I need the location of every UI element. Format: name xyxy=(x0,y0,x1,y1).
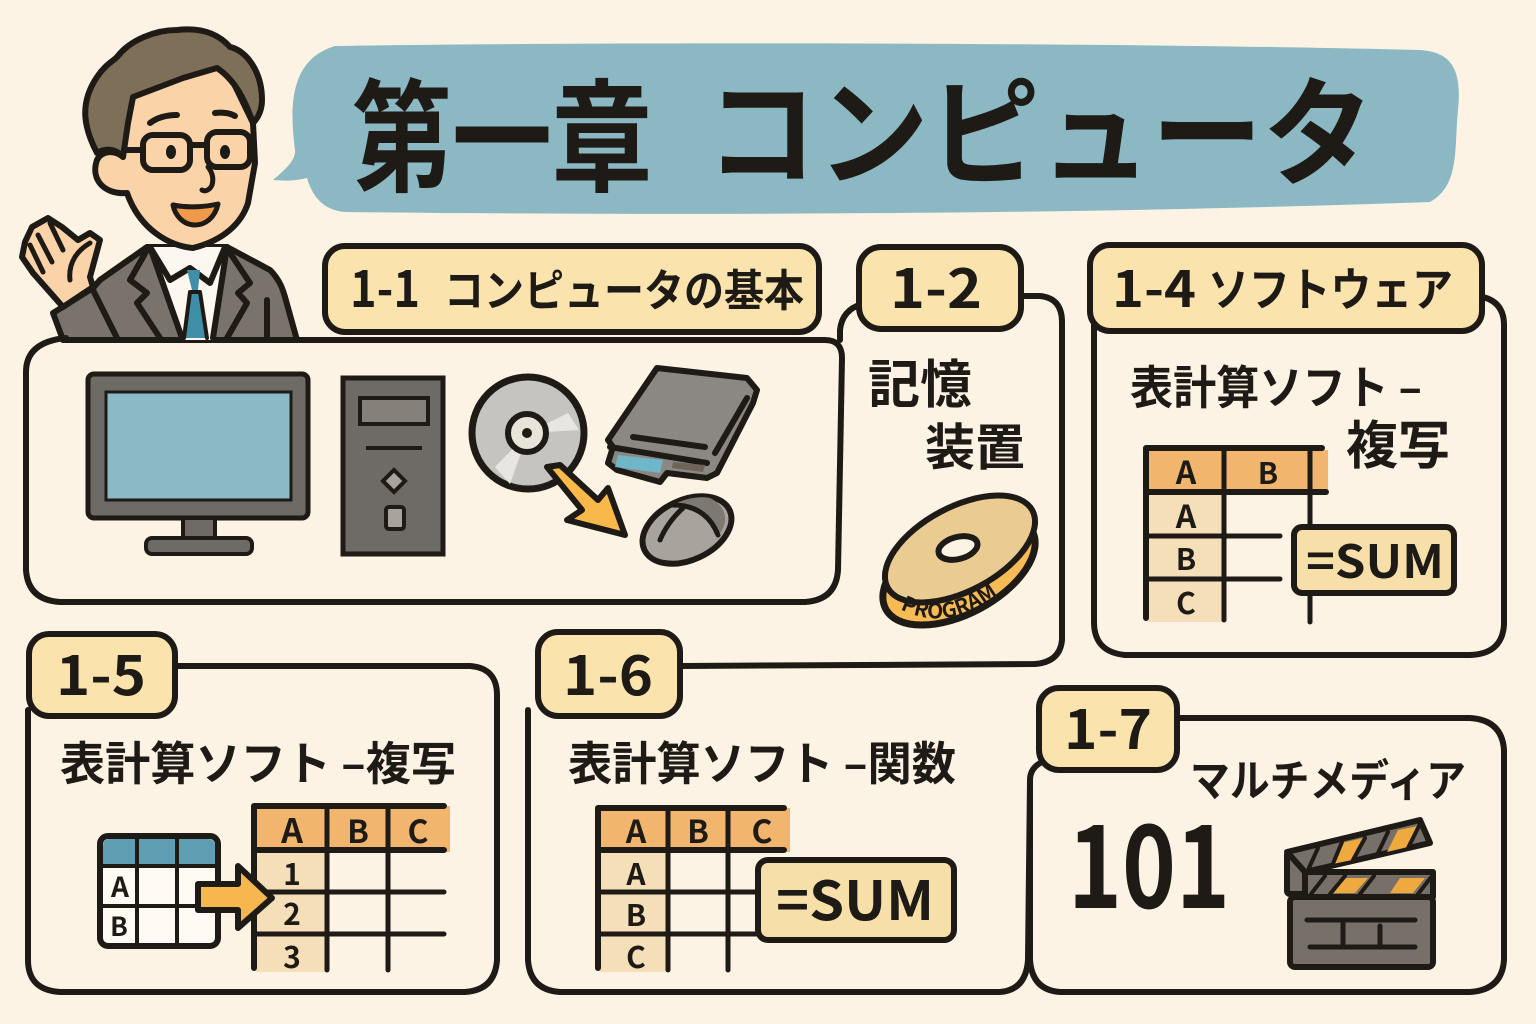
text: 101: 101 xyxy=(1068,779,1230,941)
large target table xyxy=(254,804,450,977)
text: 記憶装置: 記憶 xyxy=(868,343,972,418)
spreadsheet: C xyxy=(752,807,772,853)
panel: 1-2 storage xyxy=(683,244,1065,669)
icon: monitor xyxy=(88,374,308,554)
title banner xyxy=(273,39,1459,218)
large target table: B xyxy=(347,807,369,853)
icon: clapperboard xyxy=(1287,820,1433,967)
panel: 1-7 multimedia xyxy=(1030,686,1504,992)
arrow: copy xyxy=(198,866,272,928)
icon: optical disc xyxy=(472,377,584,489)
suit body xyxy=(53,247,297,340)
panel: 1-1 computer basics xyxy=(26,246,842,602)
heading tag: 1-5 xyxy=(29,632,175,716)
glasses xyxy=(127,145,207,150)
spreadsheet: C xyxy=(626,933,646,977)
heading tag: 1-2 xyxy=(859,245,1021,329)
spreadsheet xyxy=(1146,448,1454,623)
heading tag: 1-4: 1-4 xyxy=(1112,250,1196,322)
spreadsheet: B xyxy=(1176,535,1196,579)
large target table: 2 xyxy=(283,890,301,934)
text: 表計算ソフト-複写 xyxy=(1130,352,1450,479)
heading tag: 1-7 xyxy=(1039,686,1177,770)
heading tag: 1-1: コンピュータの基本 xyxy=(444,255,804,319)
text heading: 表計算ソフト –複写 xyxy=(60,728,456,794)
heading tag: 1-4: ソフトウェア xyxy=(1208,254,1453,320)
title banner: コンピュータ xyxy=(706,39,1374,210)
small source table: B xyxy=(110,907,128,944)
large target table: 1 xyxy=(283,850,301,894)
panel: 1-6 functions xyxy=(528,632,1030,992)
presenter character xyxy=(22,29,297,340)
heading tag: 1-4 xyxy=(1090,245,1482,331)
heading tag: 1-6 xyxy=(538,632,680,716)
heading tag: 1-7: 1-7 xyxy=(1064,686,1152,765)
large target table: A xyxy=(280,804,303,853)
panel: 1-5 copy xyxy=(28,632,497,992)
icon: program disc: PROGRAM xyxy=(902,584,996,619)
nose xyxy=(202,167,213,191)
small source table: A xyxy=(110,866,130,906)
icon: PC tower xyxy=(343,378,443,554)
icon: external drive xyxy=(608,368,757,482)
text: 記憶装置 xyxy=(868,343,1025,480)
hair xyxy=(85,29,262,157)
icon: mouse xyxy=(632,483,742,577)
mouth xyxy=(173,204,218,225)
spreadsheet: A xyxy=(625,807,647,853)
icon: program disc xyxy=(879,492,1039,628)
heading tag: 1-1: 1-1 xyxy=(350,250,420,322)
hand xyxy=(22,218,100,307)
text: マルチメディア: マルチメディア xyxy=(1190,745,1466,809)
heading tag: 1-6: 1-6 xyxy=(563,632,653,711)
large target table: C xyxy=(408,807,428,853)
heading tag: 1-5: 1-5 xyxy=(56,632,146,711)
formula box: =SUM xyxy=(1306,526,1444,592)
spreadsheet: A xyxy=(1175,448,1197,494)
spreadsheet: B xyxy=(1258,449,1278,493)
panel: 1-4 software xyxy=(1090,245,1504,655)
face xyxy=(95,55,255,248)
text: 表計算ソフト-複写: 表計算ソフト – xyxy=(1130,352,1422,418)
eyebrows xyxy=(150,113,235,123)
large target table: 3 xyxy=(283,933,301,977)
spreadsheet: A xyxy=(625,850,646,894)
heading tag: 1-1 xyxy=(325,246,819,332)
spreadsheet: B xyxy=(687,807,709,853)
spreadsheet: B xyxy=(626,891,646,935)
text: 表計算ソフト-複写: 複写 xyxy=(1346,404,1450,479)
spreadsheet: A xyxy=(1175,492,1197,538)
text heading: 表計算ソフト –関数 xyxy=(568,728,956,794)
small source table xyxy=(100,836,218,946)
formula box: =SUM xyxy=(776,857,934,936)
text: 記憶装置: 装置 xyxy=(925,408,1025,480)
arrow: disc to mouse xyxy=(547,465,625,535)
title banner: 第一章 xyxy=(352,41,652,218)
spreadsheet xyxy=(598,807,954,977)
spreadsheet: C xyxy=(1176,579,1196,623)
heading tag: 1-2: 1-2 xyxy=(890,245,982,324)
